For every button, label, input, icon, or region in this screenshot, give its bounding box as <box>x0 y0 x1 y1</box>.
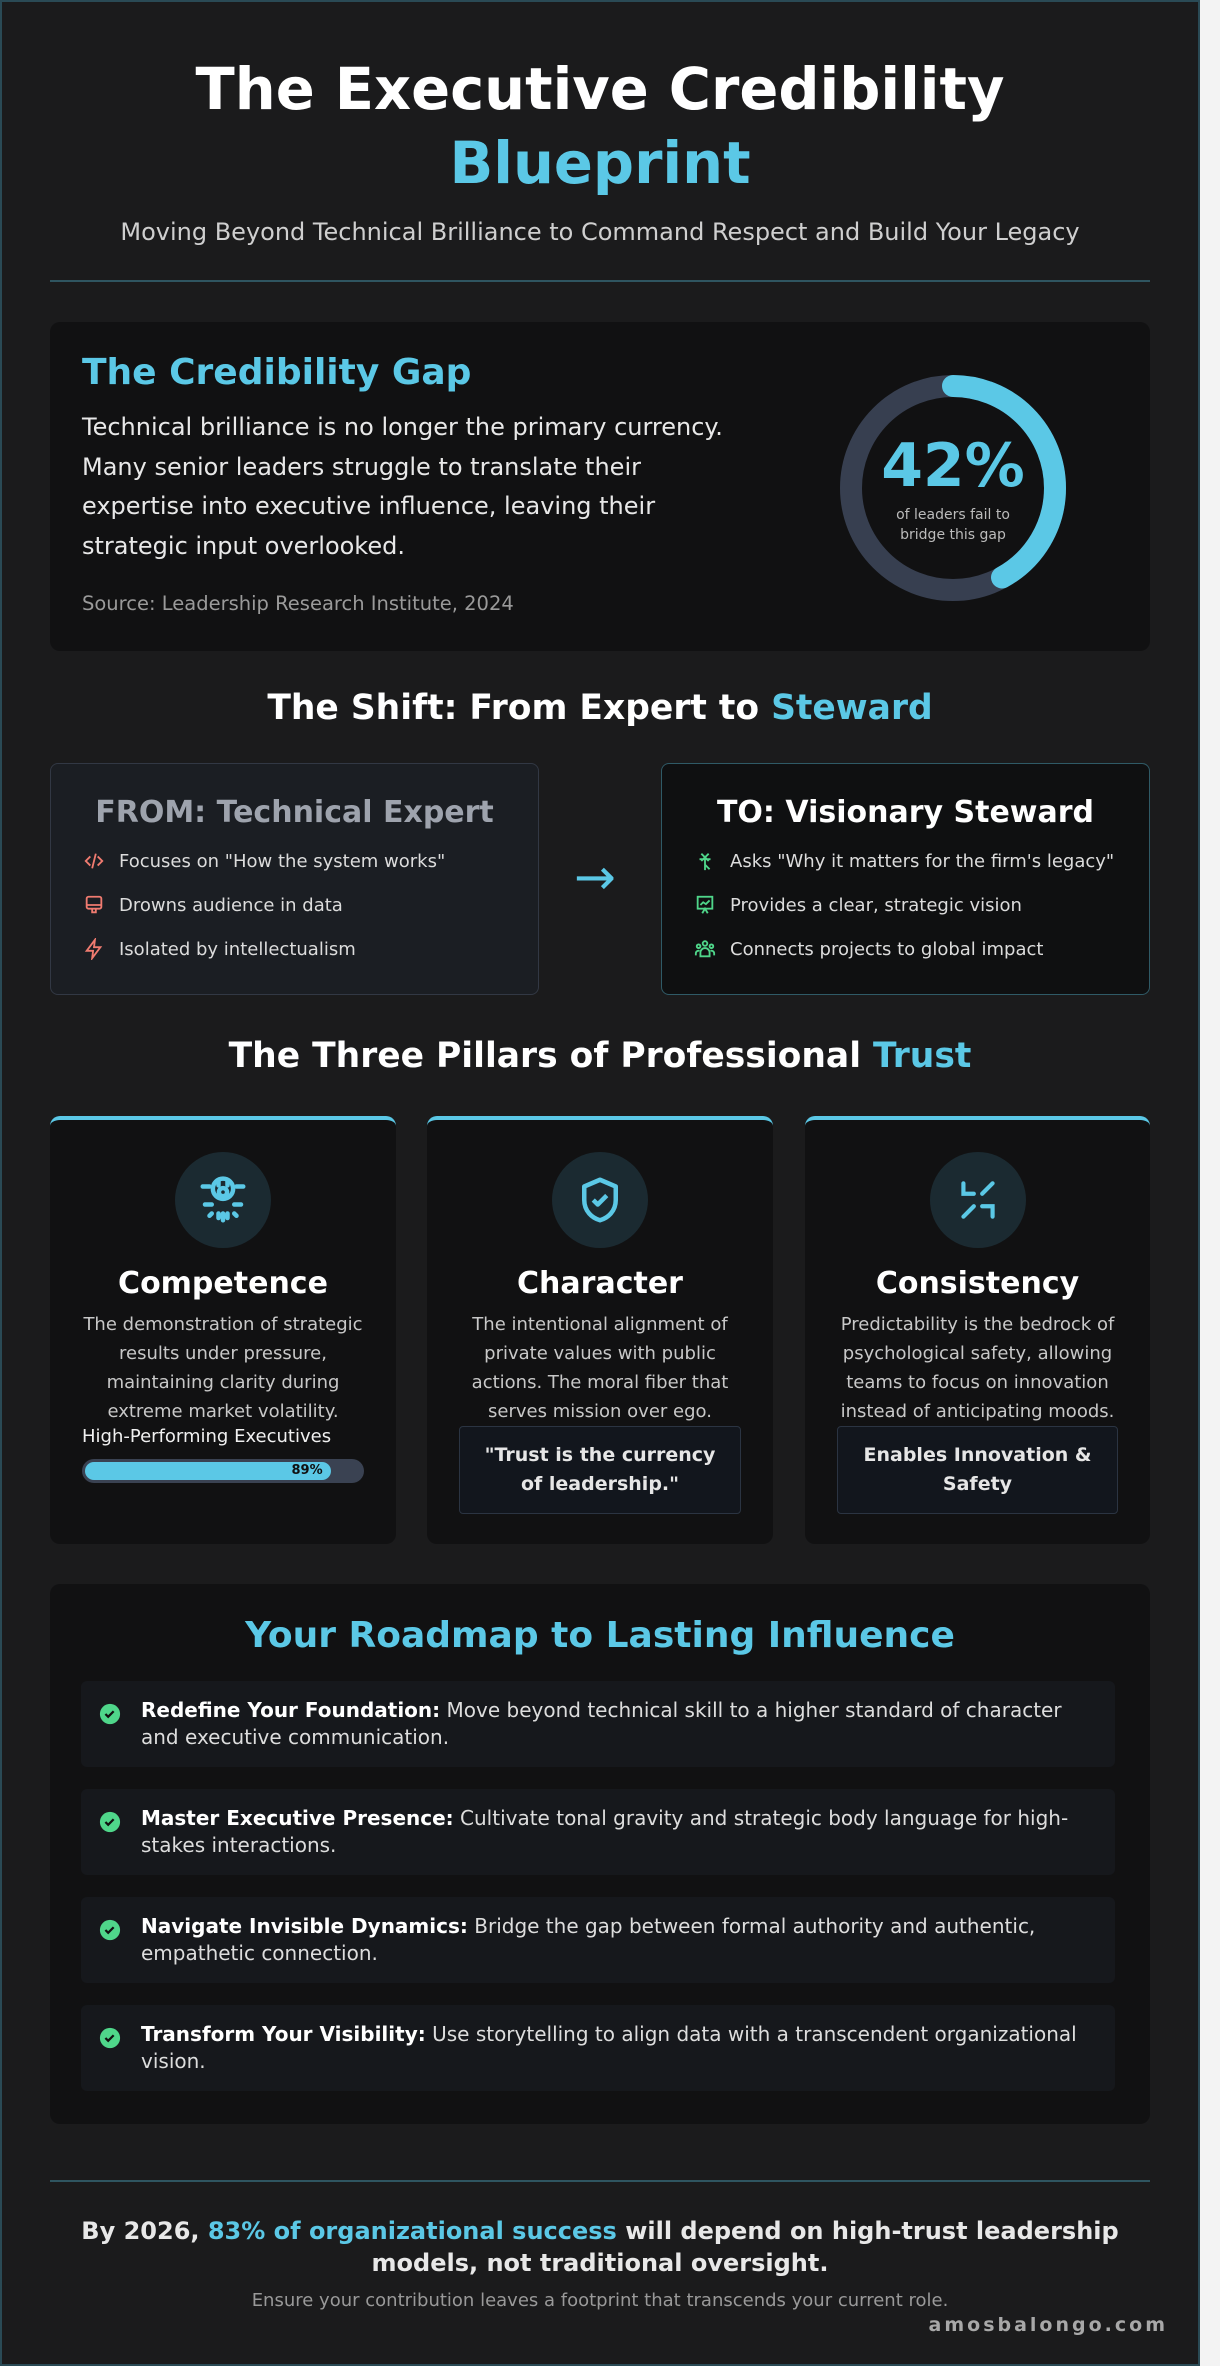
step 4: Transform Your Visibility: Use storytelling to align data with a transcendent organizational vision. <box>141 2022 1077 2073</box>
pillar: consistency <box>805 1116 1150 1544</box>
step 3 <box>81 1897 1115 1983</box>
icon: competence <box>175 1152 271 1248</box>
quote <box>459 1426 741 1514</box>
gap text: Technical brilliance is no longer the primary currency. Many senior leaders struggle to translate their expertise into executive influence, leaving their strategic input overlooked. <box>82 413 723 560</box>
step 3: Navigate Invisible Dynamics: Bridge the gap between formal authority and authentic, empathetic connection. <box>141 1914 1035 1965</box>
panel: to visionary steward: TO: Visionary Steward <box>717 795 1094 830</box>
pillar: character: Character <box>517 1266 683 1301</box>
progress bar 89% <box>82 1426 364 1483</box>
callout <box>837 1426 1118 1514</box>
donut chart 42% <box>840 375 1066 601</box>
step 2 <box>81 1789 1115 1875</box>
icon: shield <box>552 1152 648 1248</box>
heading: three pillars: The Three Pillars of Professional Trust <box>229 1036 971 1076</box>
panel: from technical expert <box>50 763 539 995</box>
pillar: competence <box>50 1116 396 1544</box>
panel: roadmap <box>50 1584 1150 2124</box>
icon: arrows <box>930 1152 1026 1248</box>
source: Source: Leadership Research Institute, 2024 <box>82 592 514 615</box>
progress bar 89%: High-Performing Executives <box>82 1426 331 1447</box>
brand: amosbalongo.com <box>929 2314 1168 2336</box>
subtitle: Moving Beyond Technical Brilliance to Command Respect and Build Your Legacy <box>120 218 1080 246</box>
pillar: consistency: Consistency <box>876 1266 1079 1301</box>
step 1: Redefine Your Foundation: Move beyond technical skill to a higher standard of character and executive communication. <box>141 1698 1062 1749</box>
pillar: character <box>427 1116 773 1544</box>
closing statement: By 2026, 83% of organizational success will depend on high-trust leadership models, not traditional oversight. <box>81 2217 1119 2277</box>
donut chart 42%: 42% <box>881 431 1025 501</box>
pillar: competence: Competence <box>118 1266 328 1301</box>
quote: "Trust is the currency <box>485 1444 715 1466</box>
panel: to visionary steward: Connects projects to global impact <box>730 938 1043 960</box>
panel: to visionary steward: Provides a clear, strategic vision <box>730 894 1022 916</box>
arrow: → <box>574 848 616 906</box>
step 2: Master Executive Presence: Cultivate tonal gravity and strategic body language for high-stakes interactions. <box>141 1806 1068 1857</box>
quote: of leadership." <box>521 1473 679 1495</box>
panel: from technical expert: FROM: Technical Expert <box>95 795 494 830</box>
panel: from technical expert: Isolated by intellectualism <box>119 938 356 960</box>
panel: from technical expert: Focuses on "How the system works" <box>119 850 445 872</box>
gap heading: The Credibility Gap <box>82 352 471 393</box>
title <box>196 56 1004 197</box>
callout: Enables Innovation & <box>864 1444 1092 1466</box>
panel: credibility gap <box>50 322 1150 651</box>
footer note: Ensure your contribution leaves a footprint that transcends your current role. <box>252 2290 948 2311</box>
title: Blueprint <box>449 130 751 197</box>
panel: from technical expert: Drowns audience in data <box>119 894 343 916</box>
pillar: competence: The demonstration of strategic results under pressure, maintaining clarity during extreme market volatility. <box>83 1314 363 1422</box>
step 1 <box>81 1681 1115 1767</box>
step 4 <box>81 2005 1115 2091</box>
pillar: character: The intentional alignment of private values with public actions. The moral fiber that serves mission over ego. <box>472 1314 728 1422</box>
pillar: consistency: Predictability is the bedrock of psychological safety, allowing teams to focus on innovation instead of anticipating moods. <box>841 1314 1114 1422</box>
roadmap heading: Your Roadmap to Lasting Influence <box>245 1615 955 1656</box>
panel: to visionary steward: Asks "Why it matters for the firm's legacy" <box>730 850 1114 872</box>
donut chart 42%: of leaders fail to <box>896 507 1010 523</box>
donut chart 42%: bridge this gap <box>900 527 1006 543</box>
progress bar 89%: 89% <box>292 1463 323 1478</box>
heading: the shift: The Shift: From Expert to Steward <box>267 688 933 728</box>
panel: to visionary steward <box>661 763 1150 995</box>
title: The Executive Credibility <box>196 56 1004 123</box>
callout: Safety <box>943 1473 1012 1495</box>
